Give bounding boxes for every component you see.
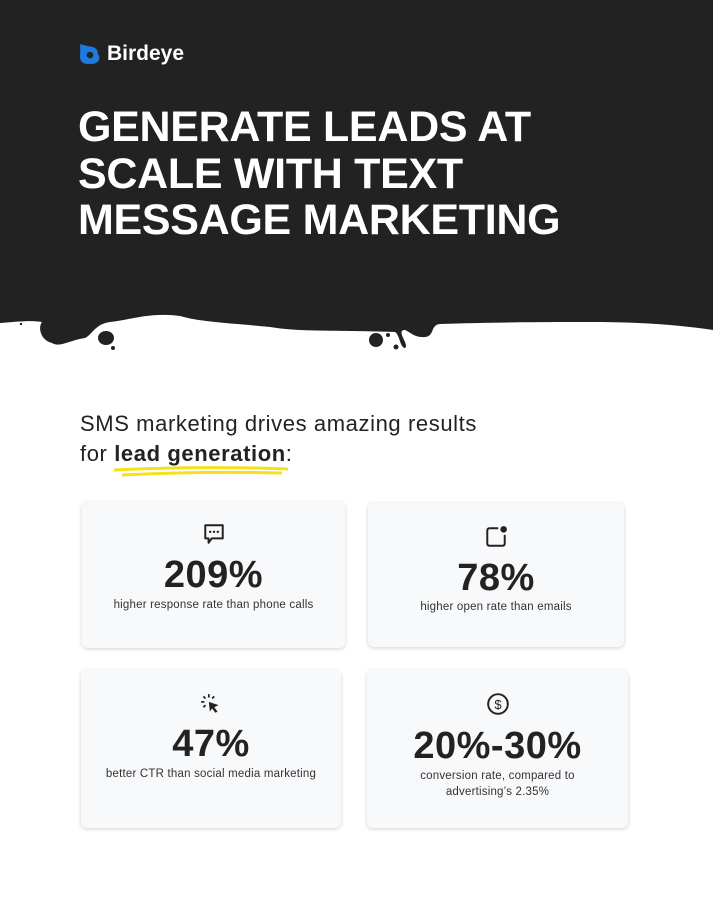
card: 47%: better CTR than social media marketing (106, 768, 316, 780)
intro text: for lead generation: (80, 441, 292, 466)
ink drops (20, 323, 399, 350)
card: 20%-30%: advertising’s 2.35% (446, 786, 549, 798)
icon: notification (486, 526, 507, 547)
card: 209%: 209% (164, 554, 263, 596)
card: 20%-30% (367, 670, 628, 828)
card: 78%: 78% (457, 557, 535, 599)
header background (0, 0, 713, 350)
icon: chat (204, 524, 224, 544)
card: 20%-30%: 20%-30% (413, 725, 582, 767)
icon: dollar (487, 693, 509, 715)
title (78, 103, 560, 244)
intro text: SMS marketing drives amazing results (80, 411, 477, 436)
card: 209%: higher response rate than phone calls (114, 599, 313, 611)
icon: dollar: $ (494, 697, 502, 712)
icon: cursor click (201, 694, 218, 713)
title: MESSAGE MARKETING (78, 196, 560, 244)
title: GENERATE LEADS AT (78, 103, 531, 151)
card: 78% (368, 503, 624, 647)
card: 78%: higher open rate than emails (420, 601, 572, 613)
card: 47%: 47% (172, 723, 250, 765)
logo: Birdeye (107, 42, 184, 65)
title: SCALE WITH TEXT (78, 150, 463, 198)
card: 47% (81, 670, 341, 828)
card: 209% (82, 502, 345, 648)
card: 20%-30%: conversion rate, compared to (420, 770, 575, 782)
intro text (80, 411, 477, 476)
